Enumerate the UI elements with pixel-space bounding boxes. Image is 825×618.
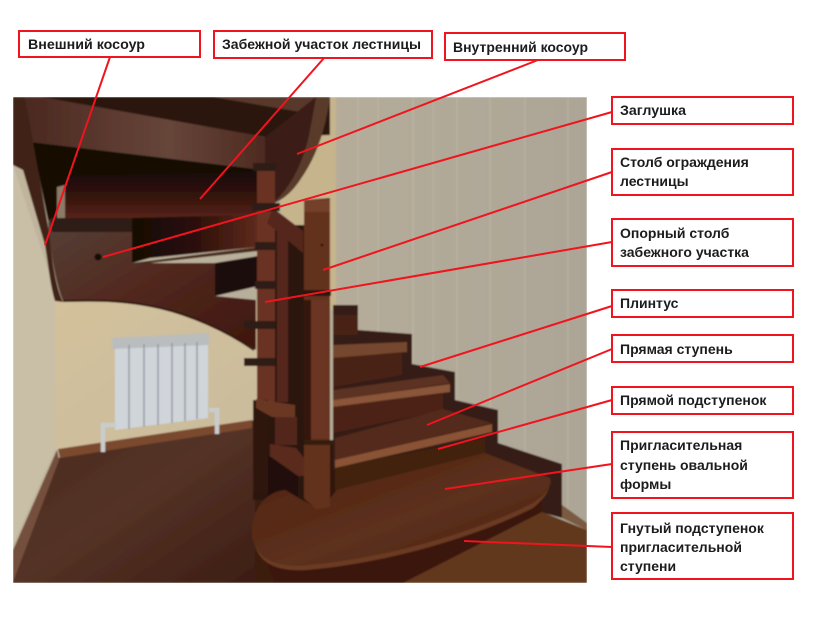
floor [13, 420, 255, 583]
label: столб ограждения лестницы: лестницы [620, 173, 689, 189]
label: забежной участок лестницы [200, 31, 432, 199]
label: заглушка [103, 97, 793, 257]
label: плинтус: Плинтус [620, 295, 679, 311]
left wall [13, 165, 55, 545]
rear baseboard [58, 420, 252, 458]
screws [94, 254, 102, 260]
underside top beam [30, 97, 330, 137]
oval tread [252, 453, 550, 565]
brackets [244, 163, 280, 366]
label: прямой подступенок: Прямой подступенок [620, 392, 767, 408]
label: опорный столб забежного участка: Опорный столб [620, 225, 730, 241]
floor lower right [403, 512, 587, 583]
textured wall [55, 300, 260, 450]
balusters [257, 165, 275, 410]
stair stringer along wall [333, 305, 562, 518]
label: внутренний косоур [297, 33, 625, 154]
lower winder riser [132, 215, 258, 263]
dark void [32, 142, 265, 220]
label: плинтус [420, 290, 793, 367]
newel post [304, 198, 333, 509]
label: гнутый подступенок пригласительной ступени [464, 513, 793, 579]
photo: wooden staircase [13, 97, 587, 583]
label: пригласительная ступень овальной формы: формы [620, 476, 671, 492]
treads and risers [333, 315, 492, 492]
label: внешний косоур [19, 31, 200, 245]
label: опорный столб забежного участка: забежного участка [620, 244, 749, 260]
label: гнутый подступенок пригласительной ступени: пригласительной [620, 539, 742, 555]
label: прямая ступень: Прямая ступень [620, 341, 733, 357]
winder riser [65, 172, 260, 220]
curved riser [262, 500, 542, 583]
label: прямая ступень [427, 335, 793, 425]
right curved stringer [264, 98, 316, 202]
label: пригласительная ступень овальной формы: ступень овальной [620, 457, 748, 473]
label: гнутый подступенок пригласительной ступени: Гнутый подступенок [620, 520, 765, 536]
outer stringer left [13, 97, 63, 302]
upper panel [25, 97, 265, 170]
label: внешний косоур: Внешний косоур [28, 36, 145, 52]
lower base [255, 398, 304, 496]
radiator [103, 333, 217, 452]
label: столб ограждения лестницы: Столб ограждения [620, 154, 749, 170]
right wall [13, 97, 587, 583]
label: заглушка: Заглушка [620, 102, 686, 118]
label: пригласительная ступень овальной формы: Пригласительная [620, 437, 742, 453]
dark mass behind balusters [253, 225, 306, 500]
handrail [267, 208, 303, 253]
left baseboard [13, 450, 59, 582]
label: внутренний косоур: Внутренний косоур [453, 39, 588, 55]
big stringer [48, 220, 256, 350]
label: опорный столб забежного участка [265, 219, 793, 302]
label: забежной участок лестницы: Забежной участок лестницы [222, 36, 421, 52]
label: гнутый подступенок пригласительной ступени: ступени [620, 558, 676, 574]
label: прямой подступенок [438, 387, 793, 449]
stringer bottom line [63, 301, 254, 350]
label: столб ограждения лестницы [323, 149, 793, 270]
label: пригласительная ступень овальной формы [445, 432, 793, 498]
